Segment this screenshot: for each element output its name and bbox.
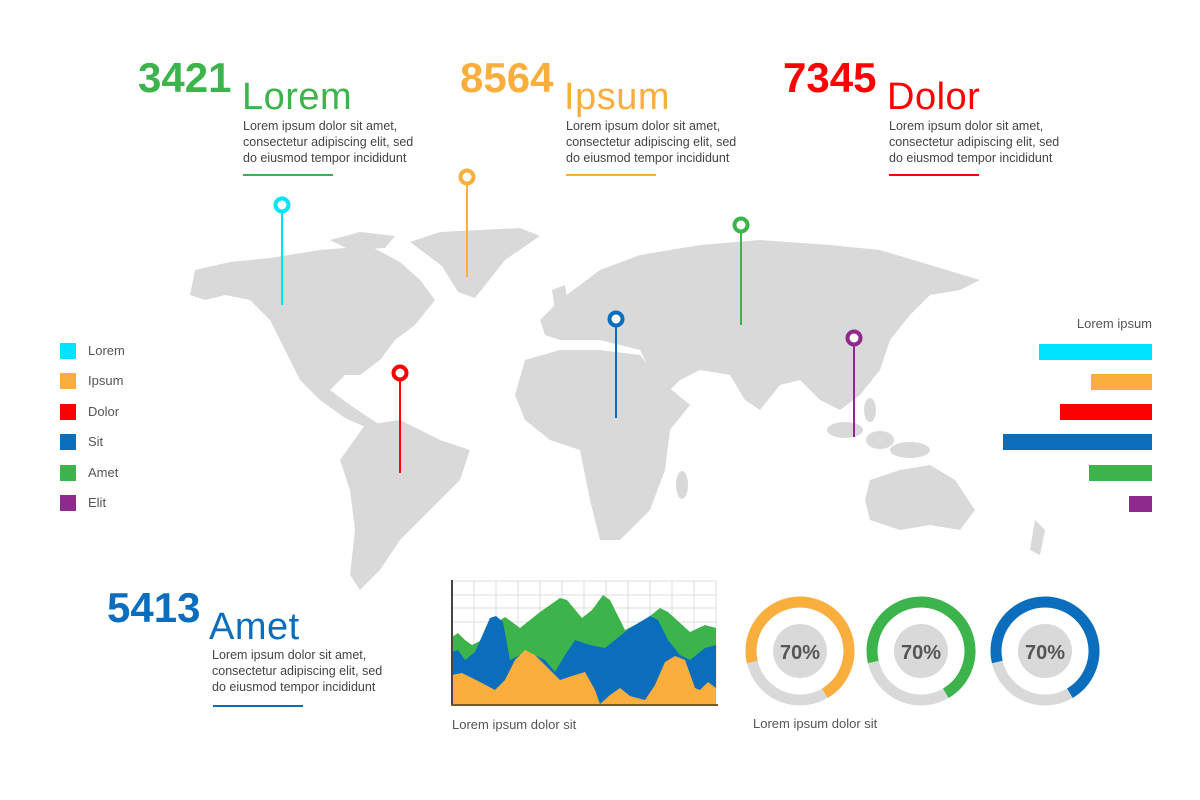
legend: Ipsum — [88, 373, 123, 388]
block: Ipsum: Lorem ipsum dolor sit amet, consectetur adipiscing elit, sed do eiusmod tempor incididunt — [566, 119, 736, 165]
legend: Sit — [88, 434, 103, 449]
chart caption: Lorem ipsum dolor sit — [452, 717, 576, 732]
bar chart: Lorem ipsum — [1077, 316, 1152, 331]
pin: purple — [848, 332, 860, 437]
donut charts — [746, 596, 1100, 731]
donut 2 — [862, 592, 980, 710]
pin: cyan — [276, 198, 288, 305]
pin: green — [734, 218, 748, 325]
block: Amet: 5413 — [107, 584, 200, 631]
block: Amet: Lorem ipsum dolor sit amet, consectetur adipiscing elit, sed do eiusmod tempor incididunt — [212, 648, 382, 694]
block: Lorem — [138, 54, 413, 176]
pin: blue — [610, 312, 622, 418]
legend: Amet — [88, 465, 118, 480]
block: Amet: Amet — [209, 606, 300, 648]
donut 3 — [986, 592, 1104, 710]
pin: orange — [460, 170, 474, 277]
block: Ipsum — [460, 54, 736, 176]
legend — [60, 343, 125, 511]
block: Amet — [107, 584, 382, 707]
block: Ipsum: Ipsum — [564, 76, 670, 118]
block: Lorem: 3421 — [138, 54, 231, 101]
block: Dolor: Dolor — [887, 76, 980, 118]
donut 1 — [741, 592, 859, 710]
block: Dolor: 7345 — [783, 54, 876, 101]
legend: Elit — [88, 495, 106, 510]
legend: Dolor — [88, 404, 119, 419]
donut 2: 70% — [901, 642, 941, 664]
donut caption: Lorem ipsum dolor sit — [753, 716, 877, 731]
bar chart — [1003, 316, 1152, 512]
pin: red — [394, 366, 406, 473]
donut 1: 70% — [780, 642, 820, 664]
block: Ipsum: 8564 — [460, 54, 553, 101]
block: Dolor — [783, 54, 1059, 176]
block: Lorem: Lorem — [242, 76, 352, 118]
block: Dolor: Lorem ipsum dolor sit amet, consectetur adipiscing elit, sed do eiusmod tempor incididunt — [889, 119, 1059, 165]
legend: Lorem — [88, 343, 125, 358]
area chart — [451, 580, 718, 732]
block: Lorem: Lorem ipsum dolor sit amet, consectetur adipiscing elit, sed do eiusmod tempor incididunt — [243, 119, 413, 165]
donut 3: 70% — [1025, 642, 1065, 664]
